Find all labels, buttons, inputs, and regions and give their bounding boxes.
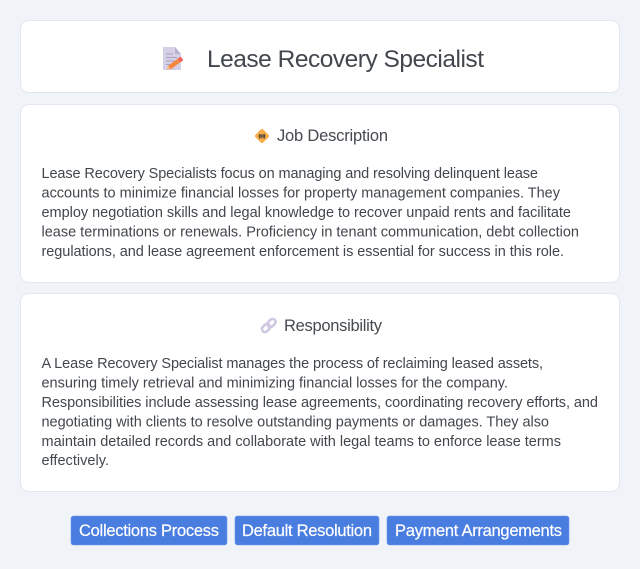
responsibility text <box>42 356 598 469</box>
tag: payment arrangements: Payment Arrangements <box>395 522 562 540</box>
job description text: accounts to minimize financial losses for property management companies. They <box>42 186 561 202</box>
tag: payment arrangements <box>387 516 569 545</box>
job description text: employ negotiation skills and legal knowledge to recover unpaid rents and facilitate <box>42 205 571 221</box>
icon: orange diamond <box>254 128 270 144</box>
responsibility text: negotiating with clients to resolve outstanding payments or damages. They also <box>42 414 549 430</box>
job description text: lease terminations or renewals. Proficiency in tenant communication, debt collection <box>42 224 579 240</box>
responsibility text: effectively. <box>42 453 109 469</box>
responsibility text: A Lease Recovery Specialist manages the process of reclaiming leased assets, <box>42 356 543 372</box>
responsibility text: Responsibilities include assessing lease agreements, coordinating recovery efforts, and <box>42 395 598 411</box>
job description text: Lease Recovery Specialists focus on managing and resolving delinquent lease <box>42 166 538 182</box>
panel: title <box>20 20 620 92</box>
icon: chain link <box>261 318 277 333</box>
tag: default resolution <box>235 516 379 545</box>
panel: job description <box>20 104 620 282</box>
responsibility text: maintain detailed records and collaborate with legal teams to enforce lease terms <box>42 434 561 450</box>
heading: job description: Job Description <box>277 127 388 145</box>
heading: responsibility: Responsibility <box>284 317 383 335</box>
tag: collections process <box>71 516 227 545</box>
panel: responsibility <box>20 294 620 492</box>
responsibility text: ensuring timely retrieval and minimizing financial losses for the company. <box>42 376 508 392</box>
tag: default resolution: Default Resolution <box>242 522 372 540</box>
job description text: regulations, and lease agreement enforcement is essential for success in this role. <box>42 244 564 260</box>
icon: document with pencil <box>163 47 182 70</box>
title text: Lease Recovery Specialist <box>207 46 484 73</box>
job description text <box>42 166 579 260</box>
tag: collections process: Collections Process <box>79 522 219 540</box>
